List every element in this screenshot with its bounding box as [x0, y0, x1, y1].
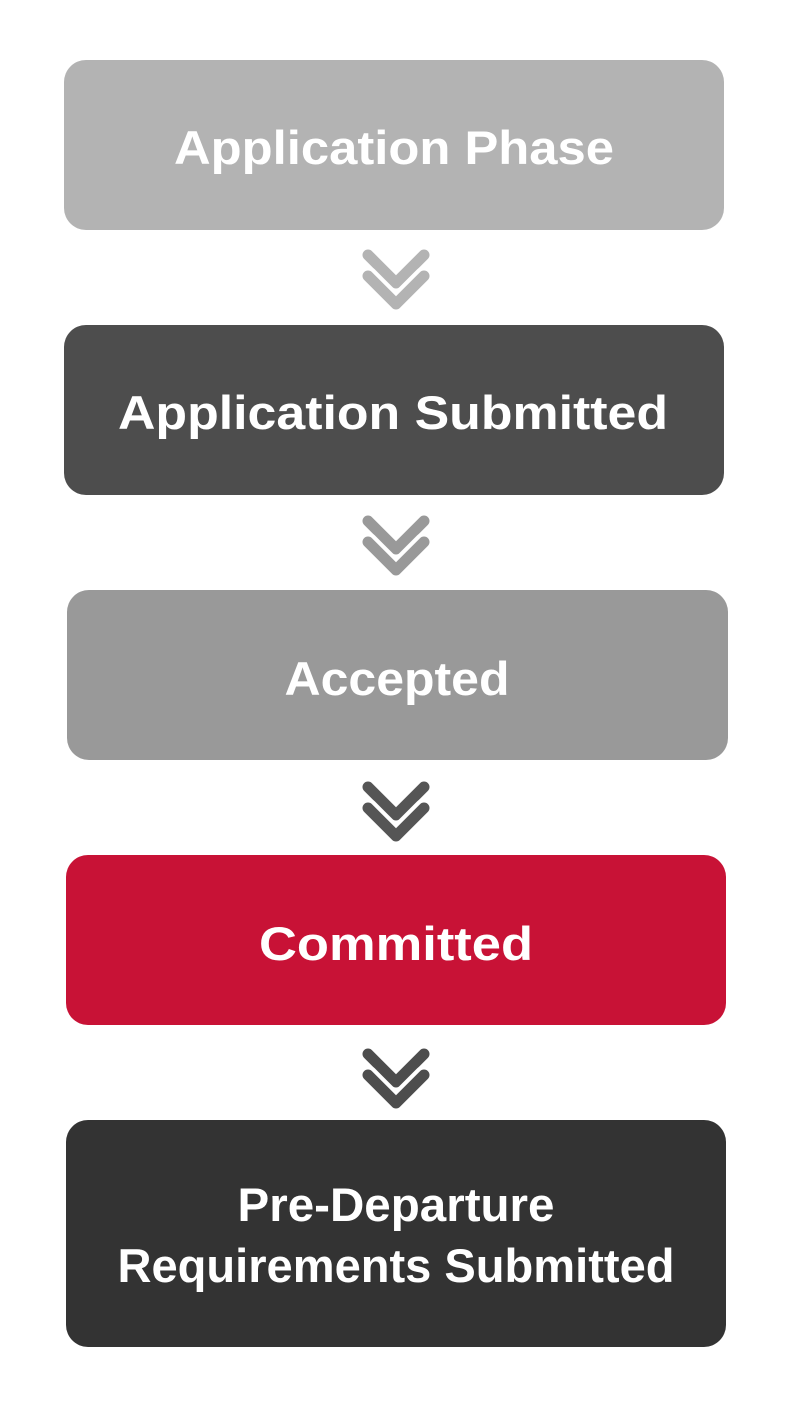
heading: Accepted: Accepted	[284, 652, 510, 705]
panel: Accepted	[67, 590, 728, 760]
arrow: chevron 4	[368, 1054, 424, 1103]
heading: Application Submitted: Application Submitted	[118, 386, 668, 439]
arrow: chevron 1	[368, 255, 424, 304]
arrow: chevron 3	[368, 787, 424, 836]
panel: Application Phase	[64, 60, 724, 230]
heading: Requirements Submitted: Requirements Submitted	[118, 1239, 674, 1292]
panel: Committed	[66, 855, 726, 1025]
heading: Pre-Departure: Pre-Departure	[238, 1178, 554, 1231]
panel: Application Submitted	[64, 325, 724, 495]
heading: Committed: Committed	[259, 917, 533, 970]
heading: Application Phase: Application Phase	[174, 121, 614, 174]
panel: Pre-Departure Requirements Submitted	[66, 1120, 726, 1347]
arrow: chevron 2	[368, 521, 424, 570]
